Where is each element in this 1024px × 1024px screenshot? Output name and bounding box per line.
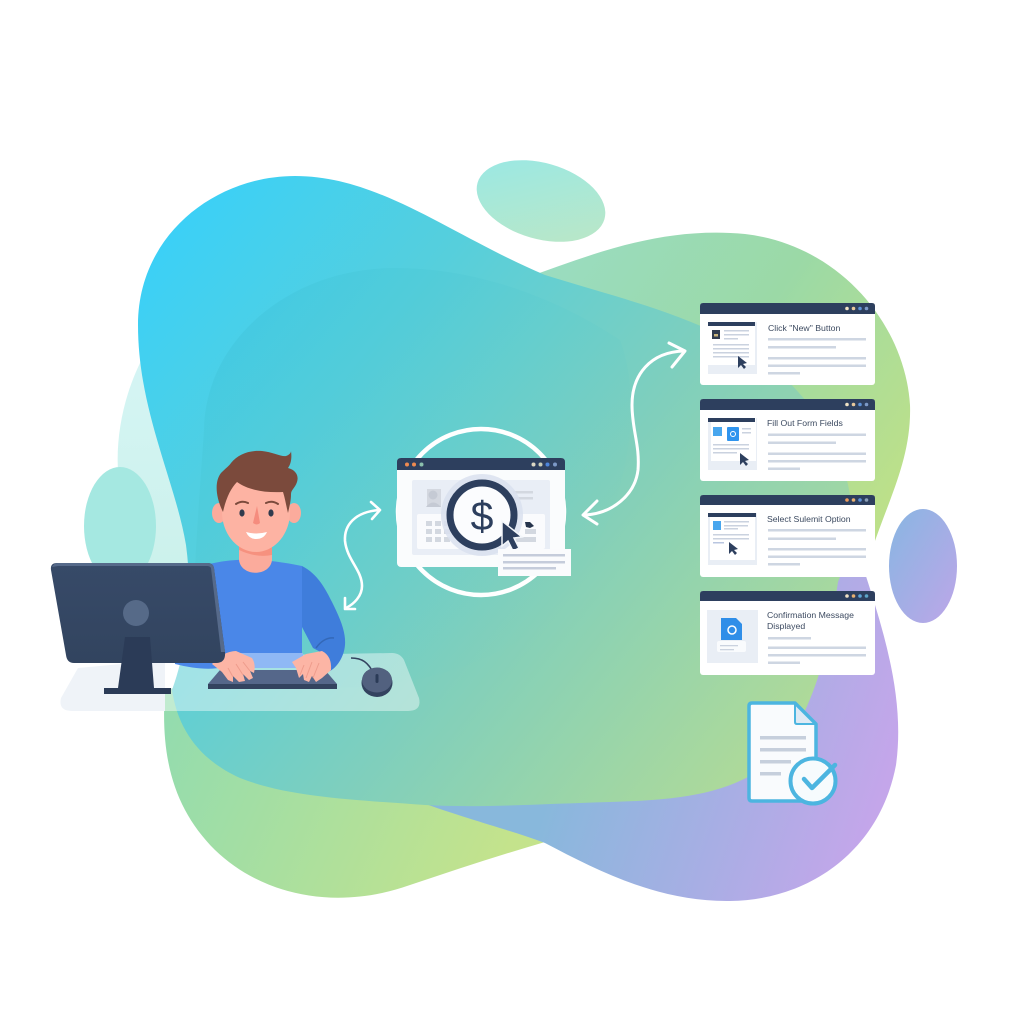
right hand (292, 651, 331, 682)
card 4 title bar (700, 591, 875, 601)
document lines (760, 736, 806, 776)
card 3 title bar (700, 495, 875, 505)
central ring (398, 429, 564, 595)
hair (217, 451, 298, 513)
tray (240, 653, 303, 668)
top teal ellipse (467, 146, 615, 256)
monitor (51, 563, 225, 694)
dollar badge (450, 483, 514, 547)
inner panel (412, 480, 550, 555)
card 3 lines (768, 529, 866, 566)
card 4 thumbnail (707, 610, 758, 663)
central browser window (397, 458, 571, 576)
mouse and cable (351, 658, 392, 697)
lower right purple blob (420, 560, 898, 901)
sleeve crease (316, 638, 334, 648)
page fold (795, 704, 815, 724)
cursor (502, 521, 522, 551)
card 2 dots (845, 403, 868, 406)
desk right part (165, 653, 420, 711)
card 1 title bar (700, 303, 875, 314)
teal left ellipse (84, 467, 156, 585)
neck shadow (239, 545, 272, 556)
screen rim (52, 563, 225, 652)
sleeve (302, 566, 345, 671)
desk surface (60, 653, 420, 711)
magnifier halo (441, 474, 523, 556)
card 4 heading (767, 610, 854, 631)
title bar (397, 458, 565, 470)
window dots (405, 462, 557, 466)
inner darker blob (194, 268, 631, 688)
card 3 heading: Select Sulemit Option (767, 514, 851, 524)
arrow: person to window (345, 502, 380, 609)
lower left green blob (164, 660, 600, 898)
card 3 (700, 495, 875, 577)
card 1 lines (768, 338, 866, 374)
card 2 heading: Fill Out Form Fields (767, 418, 843, 428)
small note (498, 549, 571, 576)
pale left blob (118, 340, 260, 660)
dollar sign: $ (471, 493, 494, 539)
power button (123, 600, 149, 626)
card 2 lines (768, 434, 866, 470)
document (749, 703, 816, 801)
card 4 (700, 591, 875, 675)
card 3 thumbnail (708, 513, 757, 565)
card 2 (700, 399, 875, 481)
card 4 heading: Confirmation Message (767, 610, 854, 620)
card 4 dots (845, 594, 868, 598)
right purple ellipse (889, 509, 957, 623)
upper right green blob (520, 233, 910, 575)
card 4 heading: Displayed (767, 621, 805, 631)
check mark (804, 765, 835, 788)
card 4 lines (768, 637, 866, 664)
card 2 title bar (700, 399, 875, 410)
profile icon (426, 489, 441, 507)
left hand (212, 651, 255, 682)
keypad (426, 491, 536, 542)
neck (239, 544, 272, 573)
check badge (790, 758, 836, 804)
card 1 heading: Click "New" Button (768, 323, 840, 333)
card 2 thumbnail (708, 418, 757, 470)
desk left part on white (60, 660, 165, 711)
card 1 (700, 303, 875, 385)
stand (104, 637, 171, 694)
face (222, 482, 290, 552)
shirt (170, 560, 302, 669)
card 1 dots (845, 307, 868, 310)
background blobs (84, 146, 957, 901)
person at computer (170, 451, 345, 689)
keyboard (208, 670, 337, 689)
card 3 dots (845, 498, 868, 502)
ears (212, 503, 226, 523)
card 1 thumbnail (708, 322, 757, 374)
arrow: window to cards (583, 343, 685, 524)
smile (246, 532, 267, 539)
form panel (417, 514, 545, 549)
main teal blob (138, 176, 852, 806)
eyebrows and eyes (236, 502, 278, 517)
screen (51, 563, 225, 663)
nose (253, 506, 260, 524)
icon: document with check (749, 703, 836, 804)
dark marker (525, 522, 534, 528)
